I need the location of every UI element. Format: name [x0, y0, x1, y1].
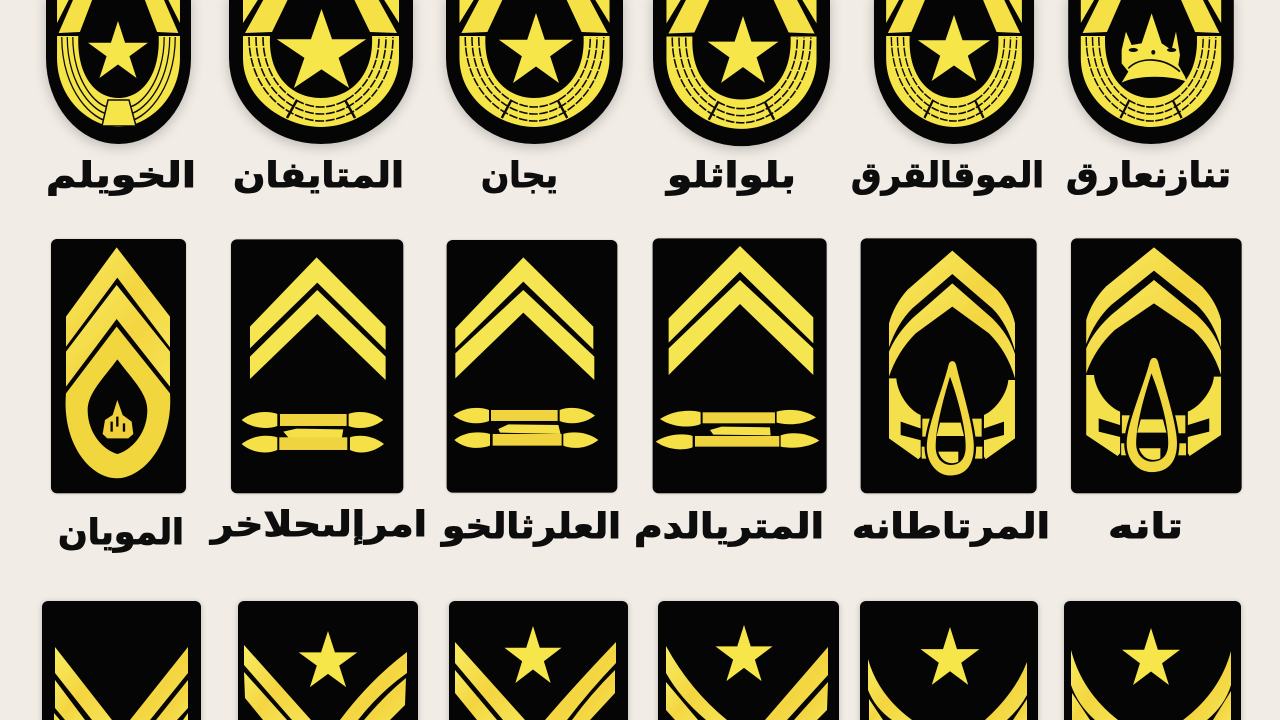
label: shield 3: يجان	[481, 156, 558, 196]
badge row 3, panel 6	[1064, 601, 1241, 720]
badge row 3, panel 2	[238, 601, 418, 720]
badge row 2, panel 4	[653, 238, 827, 493]
badge row 2, panel 2	[231, 239, 403, 493]
badge row 1, shield 4	[653, 0, 830, 146]
label: panel 4: المتريالدم	[634, 507, 824, 547]
label: shield 4: بلواثلو	[665, 156, 796, 196]
badge row 2, panel 6	[1071, 238, 1242, 493]
label: shield 5: الموقالقرق	[851, 156, 1044, 196]
label: panel 6: تانه	[1108, 507, 1183, 547]
badge row 3, panel 5	[860, 601, 1038, 720]
label: panel 1: المويان	[58, 513, 184, 553]
label: panel 3: العلرثالخو	[440, 507, 621, 547]
label: shield 6: تنازنعارق	[1066, 156, 1231, 196]
badge row 2, panel 5	[861, 238, 1037, 493]
badge row 3, panel 1	[42, 601, 201, 720]
badge row 1, shield 3	[446, 0, 623, 144]
label: panel 2: امرإلىحلاخر	[209, 505, 427, 545]
badge row 3, panel 3	[449, 601, 628, 720]
label: shield 1: الخويلم	[46, 156, 196, 196]
label: shield 2: المتايفان	[233, 156, 404, 196]
label: panel 5: المرتاطانه	[852, 507, 1050, 547]
badge row 1, shield 6 with crown	[1068, 0, 1234, 144]
badge row 2, panel 1	[51, 239, 186, 493]
badge row 1, shield 1	[46, 0, 191, 144]
badge row 2, panel 3	[447, 240, 617, 493]
badge row 1, shield 2	[229, 0, 413, 144]
badge row 3, panel 4	[658, 601, 839, 720]
badge row 1, shield 5	[874, 0, 1034, 144]
